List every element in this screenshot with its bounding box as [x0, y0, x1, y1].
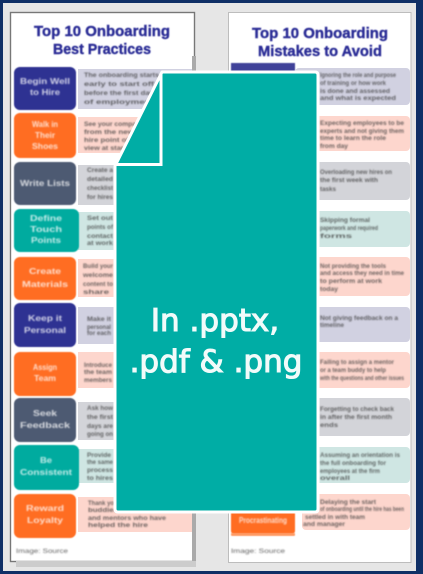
- row 5: welcome: [82, 272, 113, 279]
- row 1 text: Ignoring the role and purpose: [320, 72, 396, 79]
- row 4: at work: [87, 240, 113, 247]
- purple pill top: [231, 63, 295, 75]
- row 3 text: the first week with: [320, 177, 378, 184]
- heading: best practices: [34, 23, 170, 58]
- row 6 text: timeline: [320, 322, 344, 329]
- row 5: content to: [83, 281, 113, 288]
- row 10: settled in with team: [305, 514, 365, 521]
- row 3: [14, 162, 192, 205]
- row 4: [14, 209, 192, 252]
- row 9: to hires: [87, 475, 113, 482]
- row 6: Personal: [24, 326, 66, 335]
- row 5: [14, 257, 192, 300]
- row 9 text: Assuming an orientation is: [320, 452, 400, 459]
- row 3: Create a: [87, 167, 113, 174]
- row 2: Shoes: [32, 142, 59, 151]
- row 10: helped the hire: [88, 522, 148, 529]
- row 5 text: today: [320, 286, 338, 293]
- row 10: Reward: [26, 504, 64, 513]
- row 8 text: Forgetting to check back: [320, 406, 394, 413]
- row 2: See your company: [84, 121, 144, 128]
- row 7: [14, 352, 192, 396]
- row 6 text: Not giving feedback on a: [320, 315, 398, 322]
- row 1: Begin Well: [20, 77, 70, 86]
- row 2 text: [295, 116, 410, 151]
- row 7: the team: [84, 369, 112, 376]
- row 8: the first: [87, 414, 114, 421]
- row 3: checklist: [87, 185, 114, 192]
- row 1: [14, 67, 192, 110]
- callout text: .pdf & .png: [130, 344, 302, 380]
- row 3 text: [295, 162, 410, 200]
- row 5 text: Not providing the tools: [320, 263, 386, 270]
- row 9 text: employees at the firm: [320, 468, 380, 475]
- row 6: personal: [87, 324, 111, 331]
- row 9: Consistent: [20, 468, 72, 477]
- row 8 text: ends: [320, 422, 338, 429]
- row 3 text: tasks: [320, 186, 336, 193]
- row 2: hire point of: [84, 137, 130, 144]
- row 9: Be: [40, 456, 53, 465]
- panel: teal file callout: [115, 72, 318, 512]
- heading: best practices: Top 10 Onboarding: [34, 23, 170, 40]
- row 4: Set out: [87, 215, 114, 222]
- row 4: contact: [87, 233, 114, 240]
- row 10: buddies: [88, 507, 118, 514]
- panel: best practices page: [10, 12, 196, 567]
- row 10: [14, 494, 192, 538]
- row 8: going on: [87, 431, 113, 438]
- file shape: [115, 72, 318, 512]
- source note: Image: Source: [16, 549, 69, 555]
- row 4 text: Skipping formal: [320, 217, 370, 224]
- row 2: view at start: [84, 145, 127, 152]
- row 7 text: [295, 352, 410, 388]
- row 6 text: [295, 307, 410, 342]
- row 9: the same: [87, 459, 113, 466]
- row 5 text: and access they need in time: [320, 270, 404, 277]
- row 1: early to start off: [84, 81, 155, 88]
- row 9 text: overall: [320, 475, 350, 482]
- row 10: Loyalty: [27, 516, 64, 525]
- row 1: before the first day: [84, 90, 154, 97]
- heading: best practices: Best Practices: [53, 41, 151, 58]
- callout text: In .pptx,: [151, 303, 279, 339]
- row 10: Thank your: [88, 500, 120, 507]
- row 1 text: is done and assessed: [320, 88, 390, 95]
- row 10: [231, 494, 410, 536]
- heading: mistakes to avoid: Top 10 Onboarding: [252, 25, 388, 42]
- row 10: Procrastinating: [239, 516, 287, 525]
- row 4 text: forms: [320, 233, 353, 240]
- row 4: Define: [30, 214, 63, 223]
- row 2 text: Expecting employees to be: [320, 120, 404, 127]
- row 4 text: [295, 211, 410, 247]
- row 4 text: paperwork and required: [320, 225, 378, 232]
- row 7: Assign: [33, 363, 57, 372]
- row 5: share: [83, 289, 109, 296]
- row 3: Write Lists: [20, 179, 71, 188]
- row 1: of employment: [84, 99, 155, 106]
- row 7 text: or a team buddy to help: [320, 367, 386, 374]
- row 6: for each: [87, 330, 111, 337]
- row 5 text: to perform at work: [320, 278, 382, 285]
- row 8: [14, 398, 192, 442]
- row 9: process: [87, 467, 113, 474]
- row 2: from the new: [84, 129, 135, 136]
- row 6: Keep it: [28, 314, 62, 323]
- row 1: to Hire: [30, 88, 61, 97]
- row 6: Make it: [87, 316, 112, 323]
- row 5: Build your: [83, 263, 113, 270]
- row 10: and mentors who have: [88, 515, 166, 522]
- row 6: [14, 303, 192, 347]
- row 7 text: Failing to assign a mentor: [320, 359, 394, 366]
- row 1 text: and what is expected: [320, 95, 396, 102]
- source note: Image: Source: [231, 549, 286, 555]
- row 2 text: time to learn the role: [320, 135, 386, 142]
- row 5 text: [295, 257, 410, 296]
- callout text: [130, 303, 302, 380]
- row 10: Delaying the start: [320, 499, 377, 506]
- row 9 text: the full onboarding for: [320, 460, 386, 467]
- row 4: Touch: [30, 225, 62, 234]
- row 8: Feedback: [20, 421, 71, 430]
- row 2 text: from day: [320, 143, 348, 150]
- row 5: Create: [29, 267, 62, 276]
- row 1 text: [295, 68, 410, 105]
- row 9 text: [295, 447, 410, 483]
- row 9: Provide: [87, 452, 111, 459]
- row 3: detailed: [87, 176, 113, 183]
- row 3: for hires: [87, 194, 113, 201]
- row 10: and manager: [303, 521, 345, 528]
- heading: mistakes to avoid: Mistakes to Avoid: [258, 43, 382, 60]
- row 8: Ask how: [87, 405, 114, 412]
- row 1 text: of training or how work: [320, 80, 386, 87]
- row 8 text: [295, 398, 410, 436]
- row 8: days are: [87, 423, 113, 430]
- row 7: members: [84, 377, 112, 384]
- row 2: Their: [35, 131, 55, 140]
- row 7: Team: [34, 374, 56, 383]
- row 7: Introduce: [84, 362, 112, 369]
- row 4: points of: [87, 224, 114, 231]
- heading: mistakes to avoid: [252, 25, 388, 60]
- row 8 text: in after the first month: [320, 414, 392, 421]
- row 1: The onboarding starts: [84, 72, 159, 79]
- row 2: [14, 113, 192, 158]
- row 9: [14, 445, 192, 490]
- row 2 text: experts and not giving them: [320, 128, 404, 135]
- row 5: Materials: [22, 280, 69, 289]
- folded corner: [116, 73, 161, 164]
- panel: mistakes to avoid page: [228, 12, 411, 562]
- row 2: Walk in: [32, 120, 58, 129]
- row 8: Seek: [33, 409, 58, 418]
- row 4: Points: [31, 236, 62, 245]
- row 3 text: Overloading new hires on: [320, 169, 392, 176]
